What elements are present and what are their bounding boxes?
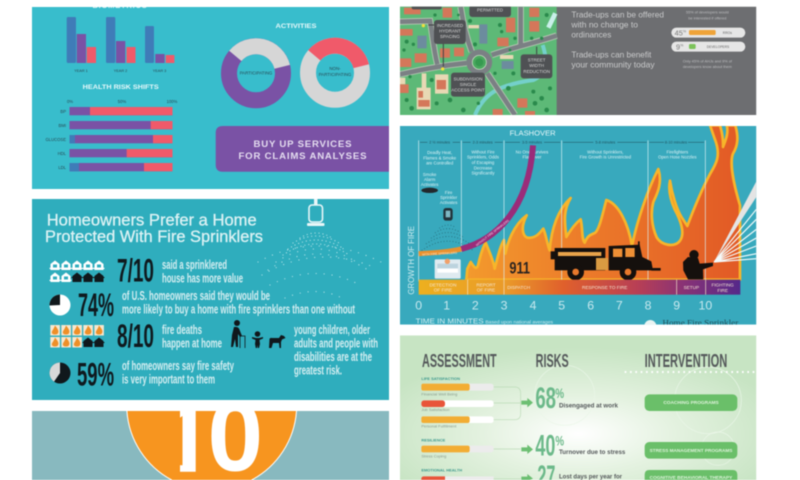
risk stats: %: [555, 432, 564, 448]
donut chart: participating: PARTICIPATING: [240, 70, 273, 76]
axis: minutes: 2: [472, 299, 479, 313]
timeline notes: Smoke: [423, 172, 437, 177]
text: trade-up benefits: your community today: [571, 60, 655, 70]
icons: seven of ten houses: [50, 260, 104, 282]
risk stats: 40: [535, 429, 555, 462]
panel: map and trade-ups: [400, 5, 756, 115]
text: greatest risk groups: adults and people with: [294, 336, 378, 350]
text: sprinklered house value: [162, 258, 244, 284]
time range markers: [420, 140, 704, 144]
text: fire deaths: fire deaths: [162, 322, 202, 337]
bar chart: yearly biometrics: YEAR 3: [153, 69, 166, 73]
assessment bars: LIFE SATISFACTION: [421, 376, 460, 381]
timeline dividers: [419, 140, 705, 281]
map illustration: INCREASED: [437, 23, 464, 28]
axis: minutes: 7: [616, 299, 623, 313]
icon: fire truck: [551, 241, 661, 280]
axis: minutes: 6: [587, 299, 594, 313]
growth curves: [419, 145, 533, 257]
text: greatest risk groups: young children, older: [294, 322, 370, 337]
roads: [400, 7, 557, 115]
heading: flashover: FLASHOVER: [510, 130, 556, 137]
axis title: time in minutes: Based upon national averages: [485, 320, 553, 325]
intervention buttons: [645, 394, 737, 480]
timeline notes: [421, 149, 697, 205]
intervention buttons: COACHING PROGRAMS: [663, 400, 719, 405]
panel: orange circle with number: [31, 410, 390, 480]
stacked bar chart: health risk shifts: 50%: [118, 99, 126, 104]
risk descriptions: [559, 403, 626, 480]
time range markers: 2 ½ minutes: [429, 140, 450, 144]
phase band: DISPATCH: [507, 285, 530, 290]
text: sprinklered house value: said a sprinklered: [162, 257, 227, 272]
timeline notes: Without Fire: [471, 149, 495, 154]
growth curves: WITHOUT FIRE SPRINKLERS: [475, 219, 510, 247]
text: trade-up benefits: Trade-ups can be offered: [571, 10, 664, 20]
timeline notes: No One Survives: [516, 149, 548, 154]
axis: minutes: [415, 299, 712, 313]
axis: minutes: 3: [501, 299, 508, 313]
callout: buy up services: [216, 126, 389, 172]
stacked bar chart: health risk shifts: HDL: [58, 151, 67, 156]
timeline notes: of Escaping: [472, 160, 495, 165]
risk descriptions: Disengaged at work: [559, 403, 618, 410]
axis: minutes: 8: [645, 299, 652, 313]
icon: 74 percent pie: [49, 294, 70, 316]
phase band: FIRE: [717, 288, 728, 293]
phase band: OF FIRE: [477, 288, 495, 293]
axis: minutes: 4: [530, 299, 537, 313]
panel: homeowners prefer fire sprinklers: [32, 199, 389, 400]
assessment bars: EMOTIONAL HEALTH: [421, 468, 462, 473]
timeline notes: Firefighters: [667, 149, 688, 154]
text: trade-up benefits: ordinances: [571, 30, 612, 40]
assessment bars: Job Satisfaction: [421, 407, 449, 412]
orange circle: [127, 411, 297, 480]
heading: activities: ACTIVITIES: [276, 23, 317, 30]
axis: minutes: 10: [698, 299, 712, 313]
phase band: DETECTION: [430, 282, 456, 287]
callout: buy up services: FOR CLAIMS ANALYSES: [238, 151, 367, 162]
map illustration: SPACING: [440, 34, 460, 39]
chart: interest pills: developers know about them: [683, 65, 732, 69]
stat: 59%: 59%: [77, 356, 114, 392]
chart: interest pills: be interested if offered: [688, 17, 726, 21]
chart: interest pills: 9: [676, 42, 680, 51]
panel: growth of fire timeline: [400, 125, 756, 332]
timeline notes: Open Hose Nozzles: [658, 154, 697, 159]
timeline notes: Significantly: [471, 171, 495, 176]
label: 911: 911: [509, 259, 530, 278]
time range markers: 2-3 minutes: [473, 140, 493, 144]
risk stats: %: [555, 385, 564, 401]
text: likely to buy: [122, 288, 355, 316]
text: fire deaths: happen at home: [162, 336, 222, 350]
stacked bar chart: health risk shifts: LDL: [58, 165, 67, 170]
map illustration: [400, 5, 557, 115]
donut chart: non-participating: PARTICIPATING: [319, 72, 352, 77]
axis: minutes: 0: [415, 299, 422, 313]
stream: [475, 45, 545, 115]
intervention buttons: STRESS MANAGEMENT PROGRAMS: [650, 448, 733, 453]
headings: RISKS: [536, 350, 569, 371]
chart: interest pills: Only 45% of AHJs and 9% of: [683, 59, 733, 63]
houses: [400, 8, 539, 115]
title: [45, 210, 263, 246]
icon: firefighter with hose: [683, 250, 713, 279]
axis title: time in minutes: [416, 317, 553, 326]
panel: assessment risks intervention: [400, 335, 756, 480]
timeline notes: Fire: [445, 190, 453, 195]
stat: 8/10: 8/10: [117, 318, 154, 354]
text: fire safety importance: is very important to them: [122, 372, 215, 386]
icon: smoke alarm: [421, 188, 438, 193]
connectors and arrows: [494, 387, 533, 480]
text: greatest risk groups: [294, 322, 378, 378]
timeline notes: Flames & Smoke: [423, 155, 457, 160]
text: greatest risk groups: disabilities are at the: [294, 349, 372, 364]
trees: [402, 13, 552, 112]
text: trade-up benefits: Trade-ups can benefit: [571, 50, 652, 60]
timeline notes: Fire Growth is Unrestricted: [580, 154, 632, 159]
axis: minutes: 1: [443, 299, 450, 313]
donut chart: non-participating: NON-: [329, 66, 341, 71]
icon: person in bed: [435, 259, 461, 279]
assessment bars: RESILIENCE: [421, 438, 446, 443]
water spray: [714, 181, 756, 262]
bar chart: yearly biometrics: [67, 17, 174, 73]
donut chart: participating: [229, 46, 283, 100]
map illustration: HYDRANT: [439, 28, 461, 33]
axis title: growth of fire: GROWTH OF FIRE: [406, 226, 416, 295]
risk descriptions: Turnover due to stress: [559, 449, 626, 456]
stacked bar chart: health risk shifts: 100%: [167, 99, 178, 104]
phase band: [419, 280, 740, 295]
assessment bars: Stress Coping: [421, 453, 446, 458]
text: fire safety importance: [122, 358, 234, 386]
text: fire safety importance: of homeowners say fire safety: [122, 358, 234, 373]
time range markers: 5-8 minutes: [595, 140, 615, 144]
stat: 74%: 74%: [78, 287, 114, 323]
timeline notes: Sprinkler: [440, 195, 458, 200]
callouts: [412, 5, 552, 97]
map illustration: REDUCTION: [523, 69, 550, 74]
chart: interest pills: %: [680, 44, 684, 48]
title: Protected With Fire Sprinklers: [45, 227, 263, 246]
time range markers: 8-10 minutes: [665, 140, 687, 144]
icon: fire sprinkler with spray: [422, 208, 473, 250]
chart: interest pills: %: [683, 30, 687, 34]
axis: minutes: 9: [673, 299, 680, 313]
map illustration: SUBDIVISION: [454, 76, 482, 81]
assessment bars: [421, 376, 494, 480]
headings: ASSESSMENT: [422, 350, 497, 371]
logo: home fire sprinkler: Home Fire Sprinkler: [662, 319, 739, 328]
map illustration: ACCESS POINT: [451, 88, 485, 93]
heading: biometrics: BIOMETRICS: [92, 1, 148, 10]
timeline notes: Activates: [440, 200, 457, 205]
stacked bar chart: health risk shifts: GLUCOSE: [46, 137, 66, 142]
chart: interest pills: DEVELOPERS: [707, 45, 730, 49]
text: greatest risk groups: greatest risk.: [294, 362, 342, 378]
stacked bar chart: health risk shifts: 0%: [67, 99, 73, 104]
panel: biometrics and health risk dashboard: [32, 1, 389, 189]
text: sprinklered house value: house has more value: [162, 270, 243, 286]
map illustration: PERMITTED: [477, 7, 504, 12]
map illustration: WIDTH: [529, 63, 544, 68]
growth curves: WITH FIRE SPRINKLERS: [422, 251, 457, 257]
timeline notes: Decrease: [474, 165, 493, 170]
assessment bars: Financial Well Being: [421, 391, 457, 396]
text: fire deaths: [162, 322, 222, 350]
timeline notes: Deadly Heat,: [427, 150, 452, 155]
flames: [466, 125, 740, 280]
phase band: SETUP: [684, 285, 699, 290]
axis title: time in minutes: TIME IN MINUTES: [416, 317, 484, 326]
text: likely to buy: more likely to buy a home with fire sprinklers than one without: [122, 302, 355, 316]
chart: interest pills: [671, 11, 745, 69]
stat: 7/10: 7/10: [117, 252, 154, 288]
phase band: FIGHTING: [712, 283, 734, 288]
bar chart: yearly biometrics: YEAR 2: [114, 69, 127, 73]
risk stats: 68: [535, 382, 556, 415]
chart: interest pills: 55% of developers would: [686, 11, 729, 15]
timeline notes: are Controlled: [426, 160, 454, 165]
intervention buttons: COGNITIVE BEHAVIORAL THERAPY: [650, 475, 733, 480]
timeline notes: Sprinklers, Odds: [467, 155, 499, 160]
stacked bar chart: health risk shifts: BP: [60, 109, 66, 114]
chart: interest pills: 45: [675, 28, 683, 37]
phase band: RESPONSE TO FIRE: [582, 285, 627, 290]
timeline notes: Activates: [421, 182, 438, 187]
assessment bars: Personal Fulfillment: [421, 424, 457, 429]
stacked bar chart: health risk shifts: BMI: [59, 123, 66, 128]
risk stats: [535, 382, 564, 480]
logo: home fire sprinkler: [644, 319, 739, 332]
text: trade-up benefits: [570, 10, 664, 70]
timeline notes: Without Sprinklers,: [587, 149, 623, 154]
headings: [422, 350, 727, 371]
stacked bar chart: health risk shifts: [46, 99, 178, 171]
headings: INTERVENTION: [645, 350, 727, 371]
icons: eight of ten flame houses: [50, 325, 104, 348]
axis: minutes: 5: [558, 299, 565, 313]
timeline notes: Flashover: [522, 155, 542, 160]
map illustration: SINGLE: [460, 82, 476, 87]
icon: sprinkler head and spray: [258, 199, 381, 298]
map illustration: STREET: [528, 57, 546, 62]
title: Homeowners Prefer a Home: [47, 210, 257, 230]
timeline notes: Alarm: [424, 177, 436, 182]
phase band: OF FIRE: [434, 288, 452, 293]
icon: 59 percent pie: [50, 362, 70, 384]
phase band: REPORT: [476, 282, 496, 287]
time range markers: 3-5 minutes: [522, 140, 542, 144]
callout: buy up services: BUY UP SERVICES: [254, 139, 352, 150]
bar chart: yearly biometrics: YEAR 1: [74, 69, 88, 73]
text: likely to buy: of U.S. homeowners said they would be: [122, 288, 270, 303]
icon: elder child and dog: [231, 320, 286, 348]
donut chart: non-participating: [308, 46, 362, 100]
chart: interest pills: RROs: [723, 31, 732, 35]
big number: [179, 410, 260, 473]
heading: health risk shifts: HEALTH RISK SHIFTS: [83, 84, 159, 91]
text: trade-up benefits: with no change to: [570, 20, 638, 30]
